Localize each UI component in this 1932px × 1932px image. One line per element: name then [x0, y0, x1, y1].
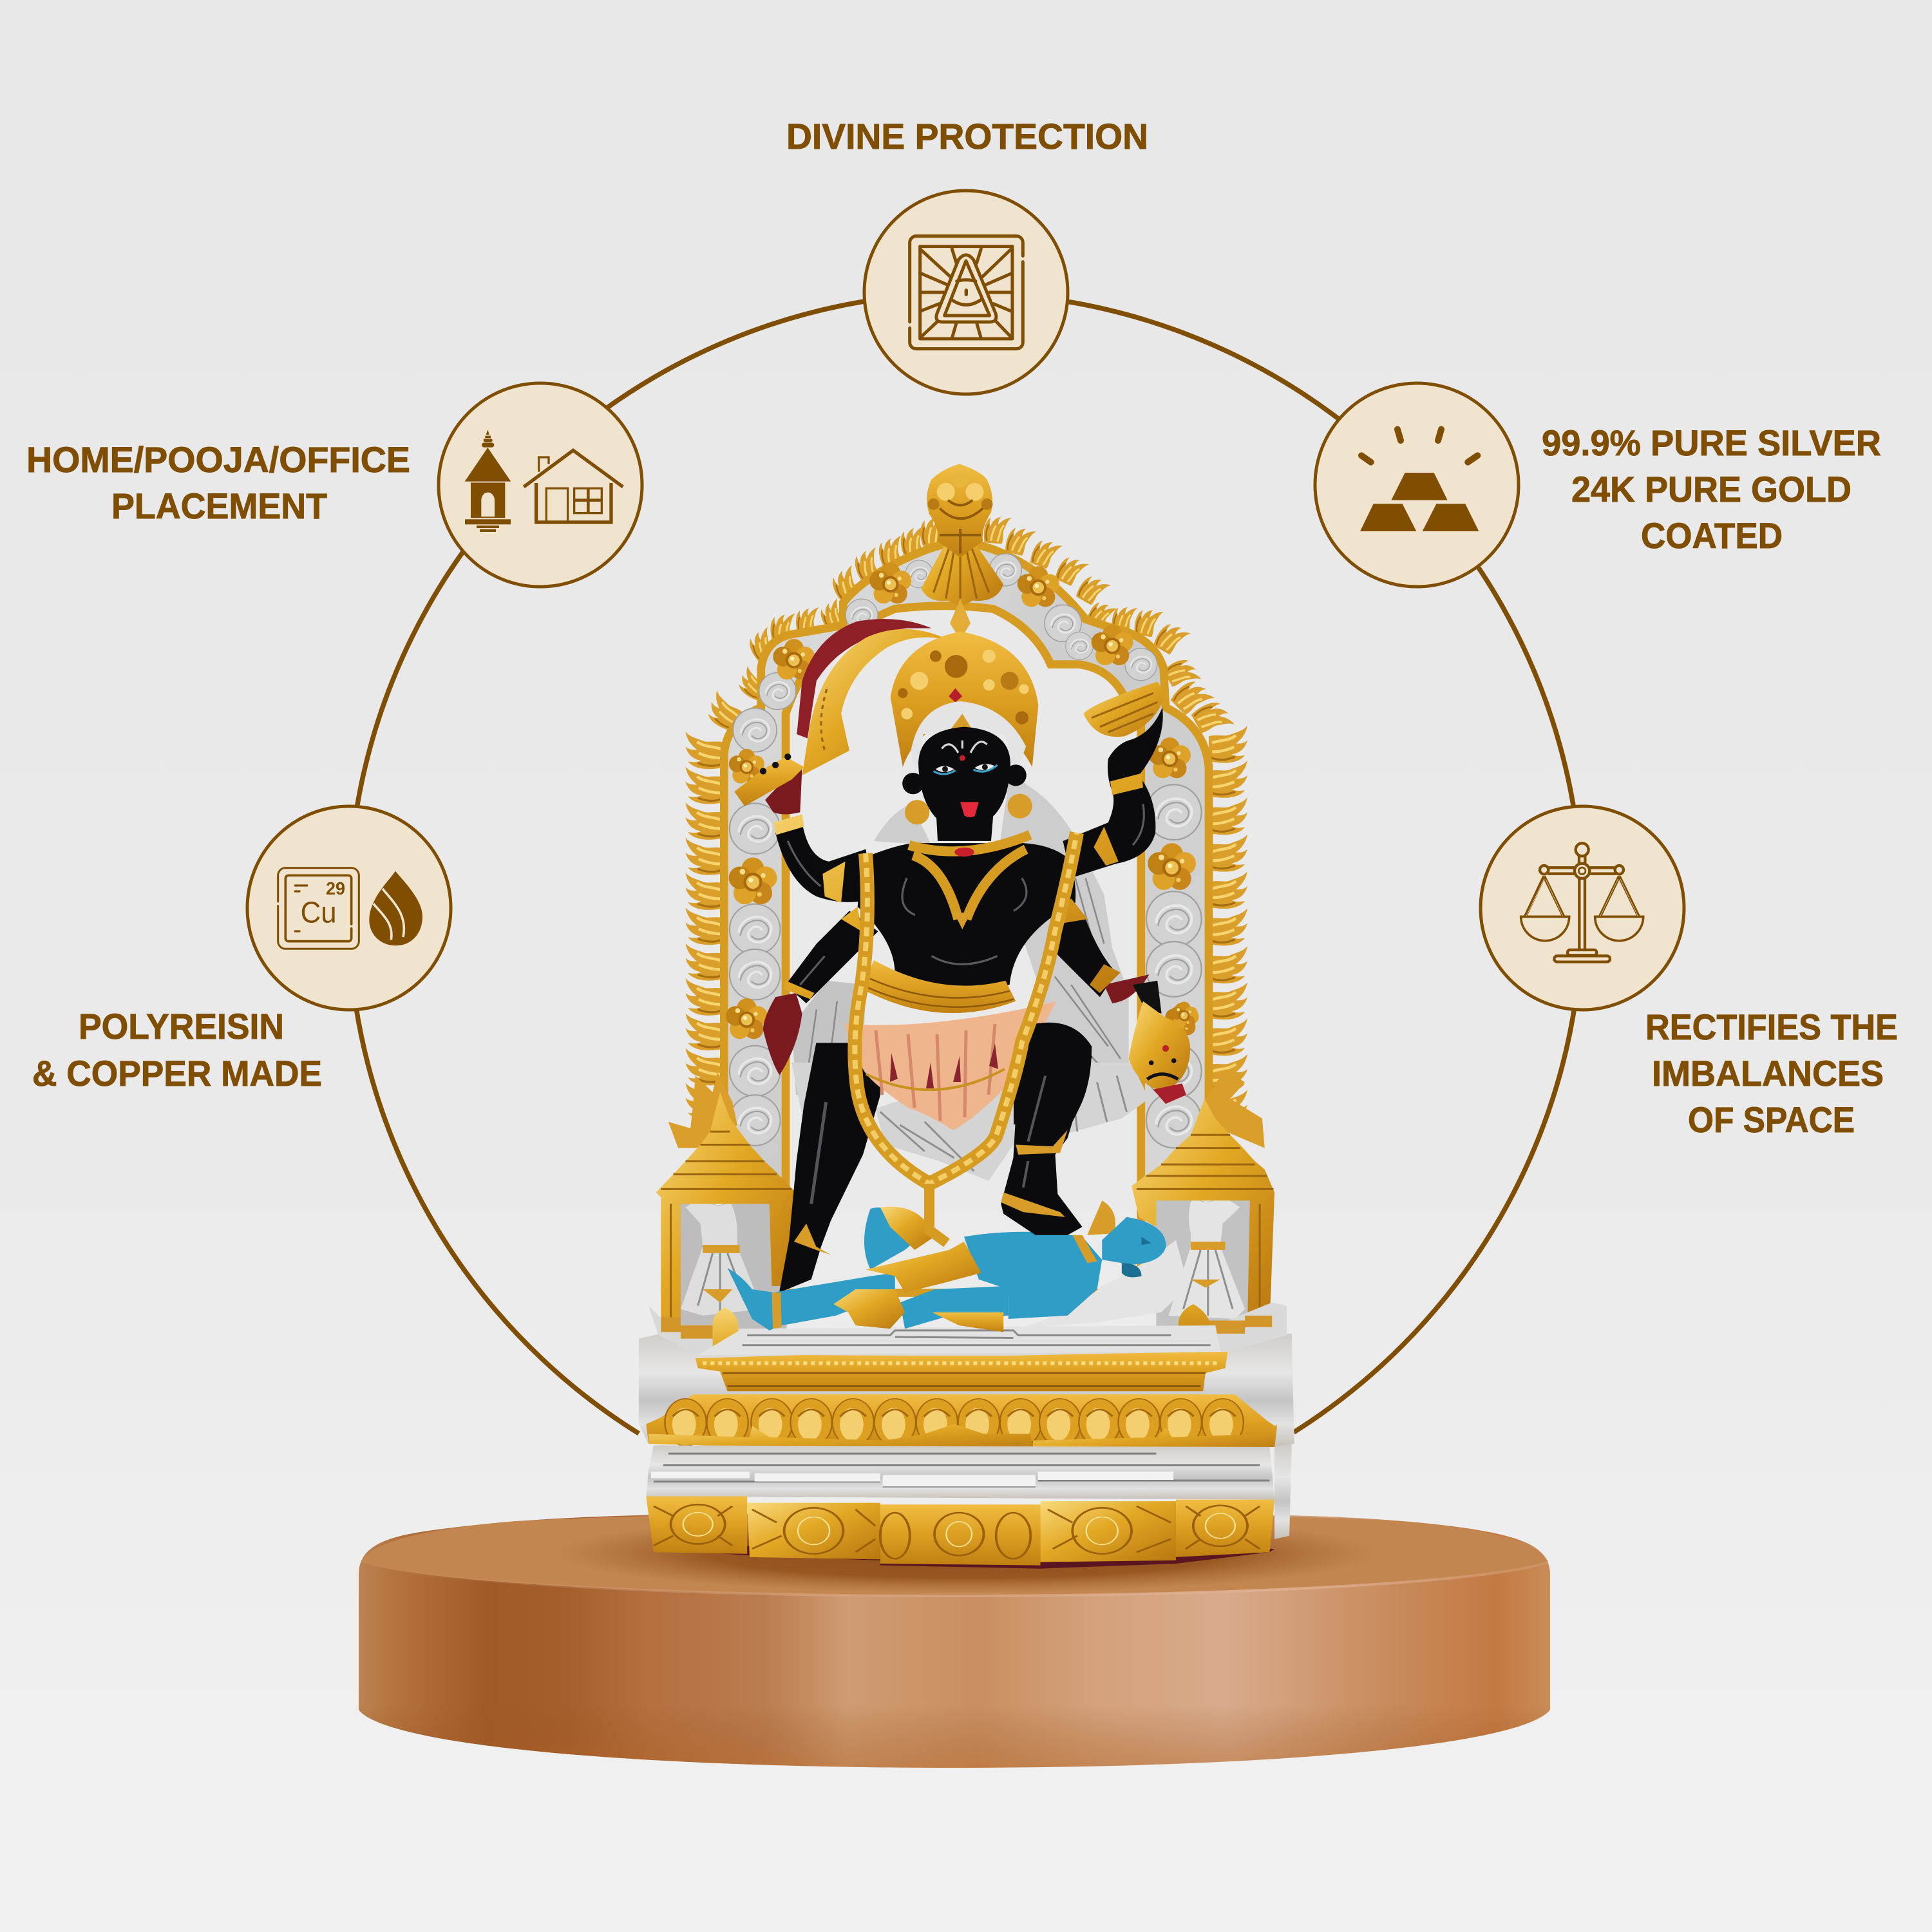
benefit: rectifies imbalances — [1481, 806, 1898, 1140]
lower left arm — [786, 911, 878, 1003]
copper round pedestal — [359, 1513, 1550, 1768]
circle badge — [864, 191, 1068, 394]
stepped gold and silver base — [646, 1352, 1292, 1539]
waist belt — [862, 960, 1016, 1013]
text line three: COATED — [1641, 515, 1783, 556]
heading: DIVINE PROTECTION — [786, 116, 1148, 156]
text line one: 99.9% PURE SILVER — [1542, 422, 1881, 463]
text line two: 24K PURE GOLD — [1571, 469, 1852, 509]
torso — [858, 843, 1075, 990]
crest mask and fan — [922, 464, 1003, 639]
icon: temple and house — [465, 430, 623, 532]
subheading: & COPPER MADE — [32, 1053, 322, 1094]
red hands — [763, 767, 1149, 1075]
circle badge — [247, 806, 451, 1010]
lower right arm — [1050, 919, 1116, 997]
benefit: home pooja office placement — [26, 383, 642, 587]
circle badge — [1315, 383, 1519, 587]
benefit: polyresin and copper — [32, 806, 451, 1094]
gold carved bottom band — [646, 1496, 1274, 1569]
left standing leg — [779, 1043, 880, 1293]
ring connecting benefit circles — [348, 293, 1582, 1434]
upper left arm and hand — [775, 822, 874, 902]
icon: copper element and drop: 29 — [326, 878, 345, 898]
circle badge — [439, 383, 642, 587]
subheading: PLACEMENT — [111, 486, 327, 526]
shin and foot on Shiva's chest — [1001, 1056, 1092, 1235]
benefit: silver and gold coating — [1315, 383, 1881, 587]
icon: eye of providence — [910, 236, 1023, 349]
upper body and arms — [763, 708, 1163, 1075]
peach skirt — [844, 1001, 1056, 1130]
silver hair behind the figure — [791, 775, 1149, 1181]
statue of Kali — [639, 464, 1294, 1569]
heading: HOME/POOJA/OFFICE — [26, 439, 410, 480]
icon: balance scales — [1521, 843, 1643, 962]
raised thigh and knee — [1014, 1023, 1092, 1124]
severed head — [1129, 981, 1198, 1104]
gold garland chain with pendant — [855, 833, 1077, 1243]
icon: copper element and drop: Cu — [301, 896, 337, 929]
silver arched frame — [724, 539, 1209, 1293]
icon: copper element and drop — [278, 868, 422, 949]
Shiva reclining in blue — [728, 1200, 1188, 1332]
circle badge — [1481, 806, 1684, 1010]
text line two: IMBALANCES — [1652, 1053, 1884, 1094]
benefit: divine protection — [786, 116, 1148, 394]
flames around frame — [685, 515, 1247, 1127]
gold arm ornaments — [773, 773, 1143, 999]
necklace — [909, 835, 1030, 929]
text line three: OF SPACE — [1688, 1099, 1855, 1140]
sword and bowl — [734, 619, 1165, 806]
heading: POLYREISIN — [79, 1006, 284, 1046]
shrines and silver plinth — [639, 1069, 1294, 1447]
icon: shining gold bars — [1360, 430, 1479, 531]
text line one: RECTIFIES THE — [1645, 1007, 1898, 1047]
torso highlights — [788, 804, 1144, 985]
upper right arm — [1063, 708, 1163, 878]
crown and head — [891, 632, 1038, 841]
